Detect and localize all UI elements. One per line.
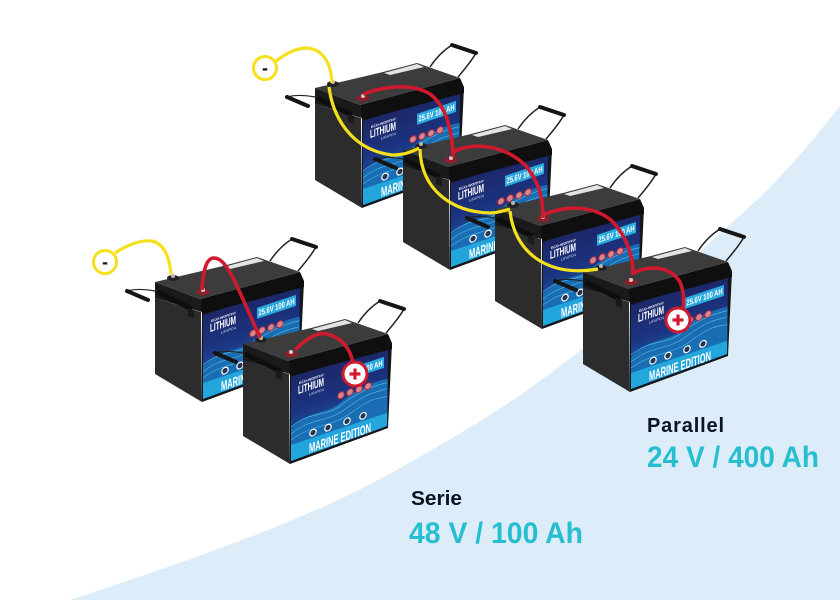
icon: series positive terminal	[343, 362, 367, 386]
battery: series front	[215, 301, 404, 467]
battery: parallel second: 25.6V 100 AH	[506, 164, 543, 186]
battery: series front: 25.6V 100 AH	[346, 358, 383, 380]
battery: parallel first: LITHIUM	[370, 119, 396, 141]
series link red cable	[202, 258, 260, 338]
text: series label: 48 V / 100 Ah	[409, 517, 583, 550]
parallel battery group	[254, 45, 744, 395]
battery: parallel second: LITHIUM	[458, 181, 484, 203]
battery: parallel second: ECO-WORTHY	[459, 179, 485, 191]
battery: parallel second: MARINE EDITION	[469, 226, 531, 262]
battery: series rear: LiFePO4	[221, 325, 237, 335]
battery: series rear: LITHIUM	[210, 313, 236, 335]
battery: parallel first: 25.6V 100 AH	[418, 102, 455, 124]
battery: series rear	[127, 239, 316, 405]
parallel yellow cables	[275, 48, 598, 271]
battery: series front: MARINE EDITION	[309, 420, 371, 456]
text: parallel label: Parallel	[647, 415, 724, 437]
battery: parallel first: ECO-WORTHY	[371, 117, 397, 129]
battery: parallel second	[375, 107, 564, 273]
battery: series rear: ECO-WORTHY	[211, 311, 237, 323]
text: parallel label: 24 V / 400 Ah	[647, 441, 819, 474]
battery: parallel third	[467, 166, 656, 332]
battery: series front: ECO-WORTHY	[299, 373, 325, 385]
battery: parallel third: MARINE EDITION	[561, 285, 623, 321]
battery: parallel fourth	[555, 229, 744, 395]
battery: parallel fourth: 25.6V 100 AH	[686, 286, 723, 308]
battery: parallel third: LITHIUM	[550, 240, 576, 262]
battery: parallel first	[287, 45, 476, 211]
battery: parallel third: ECO-WORTHY	[551, 238, 577, 250]
icon: series negative terminal: -	[102, 252, 108, 272]
battery: parallel fourth: LiFePO4	[649, 315, 665, 325]
battery: series rear: MARINE EDITION	[221, 358, 283, 394]
icon: parallel positive terminal	[666, 308, 690, 332]
battery: parallel second: LiFePO4	[469, 193, 485, 203]
battery: parallel third: LiFePO4	[561, 252, 577, 262]
battery: parallel first: MARINE EDITION	[381, 164, 443, 200]
battery: parallel fourth: MARINE EDITION	[649, 348, 711, 384]
icon: parallel negative terminal	[254, 56, 276, 80]
text: series label: Serie	[411, 488, 462, 510]
battery: parallel fourth: ECO-WORTHY	[639, 301, 665, 313]
battery: parallel third: 25.6V 100 AH	[598, 223, 635, 245]
series battery group	[94, 239, 404, 467]
battery: series front: LITHIUM	[298, 375, 324, 397]
icon: parallel negative terminal: -	[262, 58, 268, 78]
parallel red cables	[363, 87, 684, 310]
series positive red cable	[295, 334, 353, 364]
battery: parallel fourth: LITHIUM	[638, 303, 664, 325]
battery: parallel first: LiFePO4	[381, 131, 397, 141]
text: series label	[409, 488, 583, 550]
background curve	[70, 106, 840, 600]
battery: series front: LiFePO4	[309, 387, 325, 397]
icon: series negative terminal	[94, 250, 116, 274]
battery: series rear: 25.6V 100 AH	[258, 296, 295, 318]
series yellow cable	[115, 241, 171, 274]
text: parallel label	[647, 415, 819, 474]
